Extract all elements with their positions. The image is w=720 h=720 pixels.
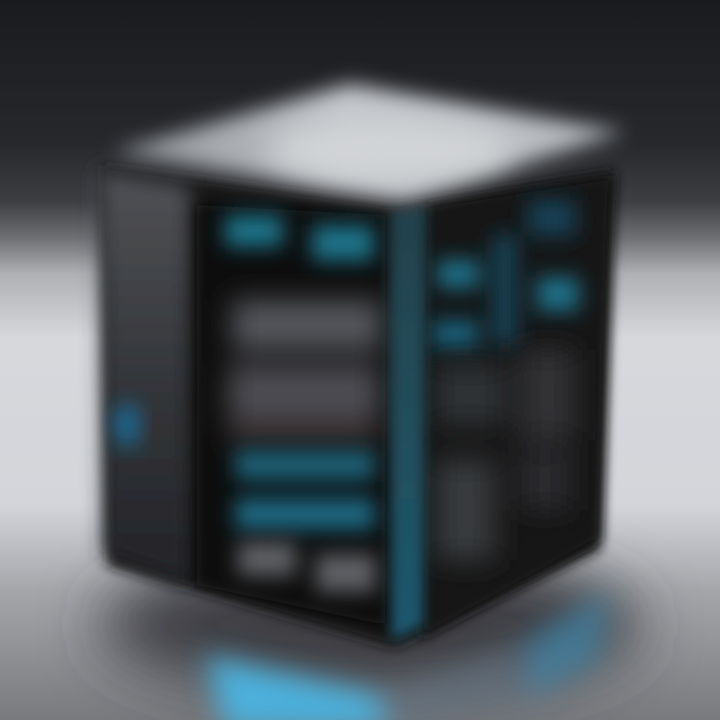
right blue modules xyxy=(432,200,579,348)
left side blue light xyxy=(113,403,141,447)
teal corner pillar xyxy=(390,205,426,640)
front top blue modules xyxy=(225,215,374,261)
reflection: blue glow on floor xyxy=(205,590,610,720)
left side panel xyxy=(100,170,190,585)
front bottom grey modules xyxy=(238,542,376,592)
cube body silhouette xyxy=(102,165,615,648)
top face highlight xyxy=(270,122,510,178)
front lower blue modules xyxy=(235,450,375,530)
cube top face xyxy=(112,84,625,200)
right side panel xyxy=(420,175,612,640)
cube xyxy=(100,84,625,648)
front grey modules xyxy=(228,300,382,440)
floor shadow xyxy=(100,555,640,695)
right grey modules xyxy=(435,350,575,560)
front panel xyxy=(197,205,385,625)
